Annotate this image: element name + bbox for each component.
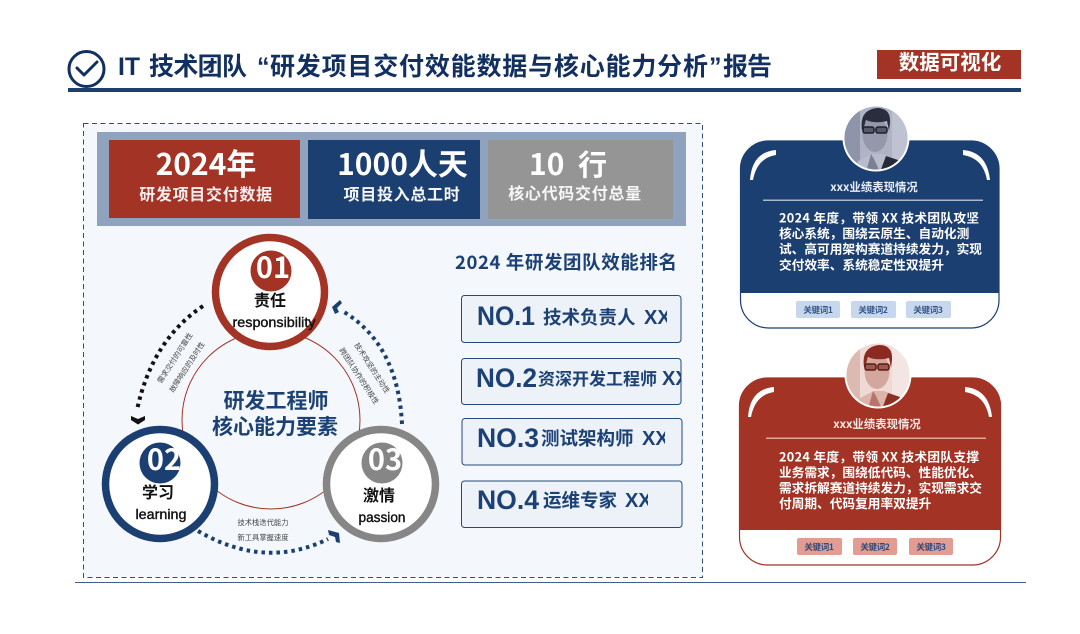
- chart: core competency cycle: [106, 238, 436, 553]
- text: right arc notes: 技术攻坚的主动性: [351, 341, 392, 395]
- keyword chips: 关键词3: [916, 541, 946, 553]
- panel: stats band: [97, 132, 686, 226]
- card body: 核心系统，围绕云原生、自动化测: [779, 223, 969, 242]
- rank 2: 资深开发工程师: [538, 365, 657, 390]
- keyword chips: [797, 538, 953, 555]
- arrow: passion to responsibility: [332, 300, 402, 424]
- node: 03 passion: [326, 430, 436, 538]
- title: [118, 47, 772, 83]
- stat card: 10 lines: 10: [529, 140, 564, 184]
- node: 01 responsibility: 责任: [254, 287, 286, 311]
- card heading: xxx业绩表现情况: [833, 416, 921, 432]
- stat card: 10 lines: 核心代码交付总量: [508, 180, 642, 204]
- rank 4: 运维专家: [543, 487, 618, 513]
- card heading: xxx业绩表现情况: [830, 179, 918, 195]
- node: 02 learning: learning: [136, 506, 186, 522]
- card body: 交付效率、系统稳定性双提升: [779, 254, 944, 274]
- stat card: 1000 person-days: 1000人天: [337, 140, 468, 184]
- rank 2: NO.2: [476, 363, 537, 393]
- center label: 研发工程师: [224, 385, 328, 415]
- card body: [779, 446, 982, 512]
- card body: 2024 年度，带领 XX 技术团队支撑: [779, 446, 979, 466]
- tag: data visualisation: [877, 46, 1021, 79]
- icon: check circle: [69, 52, 104, 86]
- node: 02 learning: [106, 430, 214, 538]
- node: 03 passion: 03: [368, 437, 402, 479]
- keyword chips: 关键词1: [804, 541, 834, 553]
- text: left arc notes: 需求交付的可靠性: [155, 331, 196, 385]
- keyword chips: [796, 301, 951, 318]
- text: right arc notes: 跨团队协作的积极性: [337, 346, 381, 407]
- panel: left dashed container: [84, 124, 702, 578]
- keyword chips: 关键词3: [913, 304, 943, 316]
- list: ranking: [462, 296, 689, 528]
- title: 报告: [723, 47, 772, 83]
- text: left arc notes: [155, 331, 208, 394]
- rank 3: NO.3: [477, 423, 539, 453]
- center label: 核心能力要素: [212, 411, 338, 441]
- panel: blue profile card: [740, 102, 999, 328]
- rank 1: XX: [644, 307, 671, 329]
- title: 技术团队: [149, 47, 247, 83]
- tag: data visualisation: 数据可视化: [899, 46, 1001, 76]
- portrait: red tone: [844, 344, 912, 408]
- center label: [212, 385, 338, 441]
- node: 03 passion: passion: [358, 509, 406, 525]
- heading: ranking: 2024 年研发团队效能排名: [455, 249, 677, 275]
- text: bottom arc notes: 技术栈迭代能力: [237, 518, 289, 528]
- card body: 付周期、代码复用率双提升: [779, 493, 932, 512]
- rank 4: NO.4: [477, 485, 539, 515]
- card body: 2024 年度，带领 XX 技术团队攻坚: [779, 208, 979, 226]
- node: 03 passion: 激情: [363, 482, 395, 506]
- node: 01 responsibility: 01: [256, 245, 290, 287]
- title: ”: [709, 53, 722, 81]
- rank 3: [462, 418, 682, 465]
- card body: 需求拆解赛道持续发力，实现需求交: [779, 478, 982, 496]
- node: 01 responsibility: responsibility: [232, 314, 316, 330]
- arrow: responsibility to learning: [131, 306, 203, 424]
- stat card: 10 lines: 行: [578, 142, 607, 184]
- header: title bar: [68, 47, 1021, 92]
- card body: 业务需求，围绕低代码、性能优化、: [779, 462, 982, 481]
- keyword chips: 关键词2: [858, 304, 888, 316]
- rank 2: [462, 358, 689, 404]
- stat card: 2024: 研发项目交付数据: [139, 181, 273, 205]
- title: “: [257, 53, 270, 81]
- stat card: 10 lines: [488, 140, 673, 219]
- panel: red profile card: [739, 339, 1001, 565]
- stat card: 1000 person-days: [308, 140, 480, 219]
- text: left arc notes: 故障响应的及时性: [167, 340, 208, 394]
- stat card: 1000 person-days: 项目投入总工时: [344, 181, 460, 205]
- title: 研发项目交付效能数据与核心能力分析: [270, 47, 708, 83]
- rank 1: [462, 296, 681, 342]
- node: 01 responsibility: [216, 238, 324, 346]
- card body: 试、高可用架构赛道持续发力，实现: [779, 238, 982, 258]
- text: bottom arc notes: 新工具掌握速度: [237, 533, 289, 543]
- stat card: 2024: [109, 140, 300, 218]
- rank 4: XX: [625, 490, 652, 512]
- rank 4: [462, 481, 682, 528]
- arrow: learning to passion: [198, 530, 340, 553]
- node: 02 learning: 02: [147, 437, 181, 479]
- portrait: blue tone: [842, 106, 910, 172]
- rank 1: 技术负责人: [543, 304, 636, 330]
- keyword chips: 关键词1: [803, 304, 833, 316]
- rank 3: XX: [642, 428, 669, 450]
- node: 02 learning: 学习: [142, 479, 174, 503]
- rank 1: NO.1: [477, 301, 535, 331]
- title: IT: [118, 53, 140, 81]
- keyword chips: 关键词2: [860, 541, 890, 553]
- rank 2: XX: [662, 368, 689, 390]
- rank 3: 测试架构师: [541, 425, 634, 451]
- stat card: 2024: 2024年: [156, 140, 256, 184]
- text: bottom arc notes: [237, 518, 289, 543]
- card body: [779, 208, 982, 274]
